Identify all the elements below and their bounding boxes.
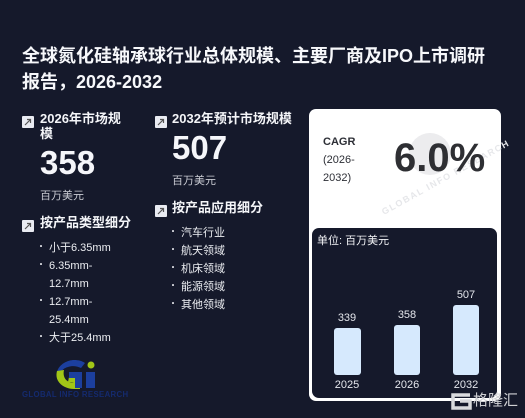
panel: product type breakdown	[22, 215, 131, 344]
list: applications: 机床领域	[181, 263, 225, 275]
bar chart	[312, 228, 497, 398]
title: 报告，2026-2032	[22, 72, 162, 92]
bar 2026	[394, 309, 420, 391]
bar 2032: 2032	[454, 379, 478, 391]
icon: arrow badge	[22, 220, 34, 232]
bar 2025	[334, 312, 361, 391]
CAGR label	[323, 136, 356, 184]
heading: product type: 按产品类型细分	[40, 215, 131, 230]
number: 507: 507	[172, 129, 227, 166]
bar 2032	[453, 289, 479, 391]
CAGR value: 6.0%	[394, 136, 485, 180]
unit: 百万美元	[40, 190, 84, 202]
number: 358: 358	[40, 144, 95, 181]
heading: 2032 forecast: 2032年预计市场规模	[172, 111, 292, 126]
unit: 百万美元	[172, 175, 216, 187]
CAGR label: CAGR	[323, 136, 355, 148]
heading: 2026 market size: 模	[40, 126, 53, 141]
list: product types: 小于6.35mm	[49, 242, 111, 254]
list: applications: 能源领域	[181, 281, 225, 293]
panel: 2032 forecast market size	[155, 111, 292, 187]
bar 2026: 358	[398, 309, 416, 321]
list: product types	[40, 242, 111, 344]
list: product types: 25.4mm	[49, 314, 89, 326]
icon: arrow badge	[155, 116, 167, 128]
heading: 2026 market size: 2026年市场规	[40, 111, 121, 126]
icon: arrow badge	[22, 116, 34, 128]
watermark blob	[409, 133, 451, 175]
panel: CAGR card	[309, 109, 501, 401]
list: product types: 12.7mm-	[49, 296, 92, 308]
list: applications: 其他领域	[181, 299, 225, 311]
bar 2032: 507	[457, 289, 475, 301]
watermark: Gelonghui logo	[451, 392, 518, 410]
CAGR label: (2026-	[323, 154, 355, 166]
CAGR label: 2032)	[323, 172, 351, 184]
bar 2026: 2026	[395, 379, 419, 391]
logo: Global Info Research	[22, 360, 129, 399]
icon: arrow badge	[155, 205, 167, 217]
heading: application: 按产品应用细分	[172, 200, 263, 215]
logo: Global Info Research: GLOBAL INFO RESEARCH	[22, 390, 129, 399]
list: product types: 12.7mm	[49, 278, 89, 290]
watermark: Gelonghui logo: 格隆汇	[473, 392, 518, 409]
unit label: 单位: 百万美元	[317, 235, 389, 247]
list: product types: 大于25.4mm	[49, 332, 111, 344]
title: 全球氮化硅轴承球行业总体规模、主要厂商及IPO上市调研	[22, 46, 485, 66]
panel: application breakdown	[155, 200, 263, 311]
list: product types: 6.35mm-	[49, 260, 92, 272]
bar 2025: 339	[338, 312, 356, 324]
list: applications: 汽车行业	[181, 227, 225, 239]
panel: 2026 market size	[22, 111, 121, 202]
list: applications	[172, 226, 225, 311]
list: applications: 航天领域	[181, 245, 225, 257]
watermark: GLOBAL INFO RESEARCH	[380, 138, 512, 217]
title	[22, 46, 485, 92]
bar 2025: 2025	[335, 379, 359, 391]
heading: 2026 market size	[40, 111, 121, 141]
